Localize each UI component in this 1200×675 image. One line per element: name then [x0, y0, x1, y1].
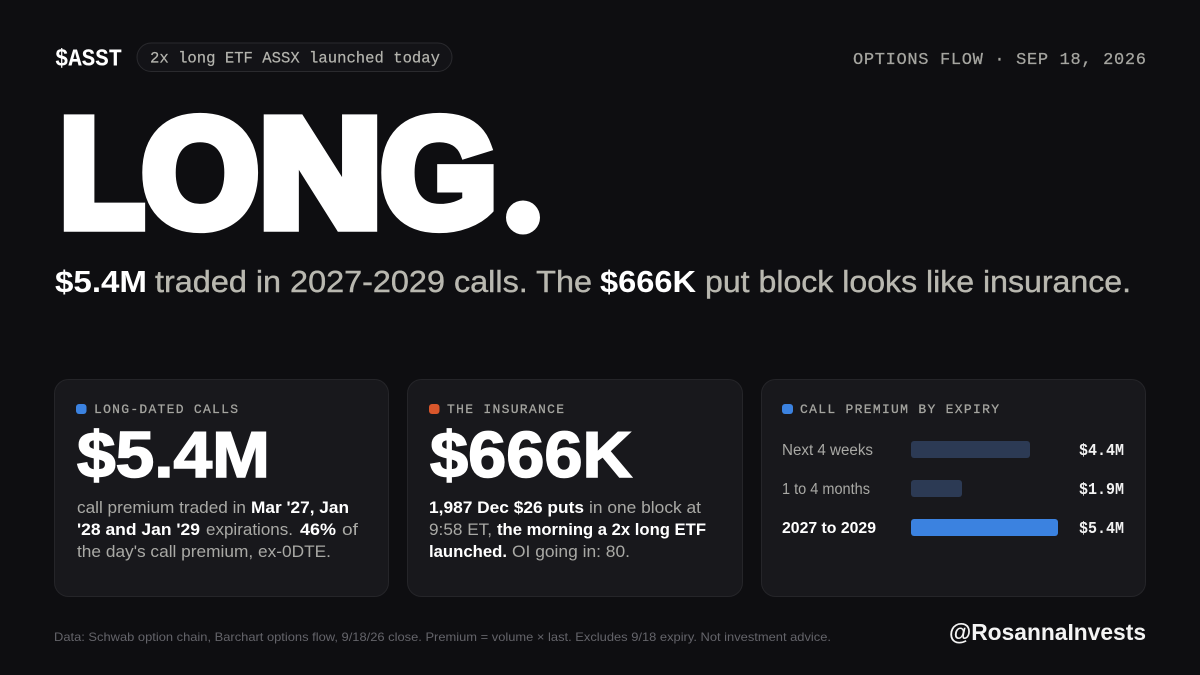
row: 2027 to 2029: $5.4M [1079, 519, 1124, 538]
description: Mar '27, Jan [251, 498, 349, 517]
subheadline [55, 265, 1131, 299]
description: 9:58 ET, [429, 520, 492, 539]
bar chart [782, 441, 1124, 538]
headline: . [516, 193, 527, 237]
pill: ETF launch note [137, 43, 452, 72]
headline: G [381, 88, 497, 259]
icon: blue marker [782, 404, 793, 414]
panel label: THE INSURANCE [447, 402, 564, 417]
pill: ETF launch note: 2x long ETF ASSX launched today [150, 50, 440, 68]
description: 46% [300, 520, 336, 539]
description: '28 and Jan '29 [77, 520, 200, 539]
panel label: CALL PREMIUM BY EXPIRY [800, 402, 999, 417]
panel: long-dated calls [54, 380, 388, 596]
big number: $5.4M [77, 418, 270, 491]
panel label: LONG-DATED CALLS [94, 402, 238, 417]
description: call premium traded in [77, 498, 246, 517]
subheadline: $666K [600, 265, 696, 299]
description: of [342, 520, 358, 539]
ticker: $ASST [55, 46, 122, 74]
row: 2027 to 2029 [782, 519, 1124, 538]
description: launched. [429, 542, 507, 561]
panel: call premium by expiry [762, 380, 1146, 596]
description: the day's call premium, ex-0DTE. [77, 542, 331, 561]
panel: the insurance [408, 380, 742, 596]
description: expirations. [206, 520, 293, 539]
icon: blue marker [76, 404, 86, 414]
big number: $666K [430, 418, 632, 491]
description: 1,987 Dec $26 puts [429, 498, 584, 517]
description [77, 498, 358, 561]
description [429, 498, 706, 561]
headline: L [60, 88, 144, 259]
row: 2027 to 2029: 2027 to 2029 [782, 520, 876, 537]
subheadline: $5.4M [55, 265, 147, 299]
icon: orange marker [429, 404, 440, 414]
row: next 4 weeks: Next 4 weeks [782, 442, 873, 459]
footnote: Data: Schwab option chain, Barchart options flow, 9/18/26 close. Premium = volume × last. Excludes 9/18 expiry. Not investment advice. [54, 630, 831, 644]
dateline: OPTIONS FLOW · SEP 18, 2026 [853, 51, 1146, 70]
headline: N [259, 88, 382, 259]
row: next 4 weeks: $4.4M [1079, 441, 1124, 460]
subheadline: put block looks like insurance. [705, 265, 1131, 299]
description: in one block at [589, 498, 701, 517]
row: 1 to 4 months: 1 to 4 months [782, 481, 870, 498]
headline [60, 88, 540, 259]
row: next 4 weeks [782, 441, 1124, 460]
row: 1 to 4 months [782, 480, 1124, 499]
subheadline: traded in 2027-2029 calls. The [155, 265, 592, 299]
handle: @RosannaInvests [949, 619, 1146, 645]
headline: O [142, 88, 258, 259]
description: the morning a 2x long ETF [497, 520, 706, 539]
row: 1 to 4 months: $1.9M [1079, 480, 1124, 499]
description: OI going in: 80. [512, 542, 630, 561]
